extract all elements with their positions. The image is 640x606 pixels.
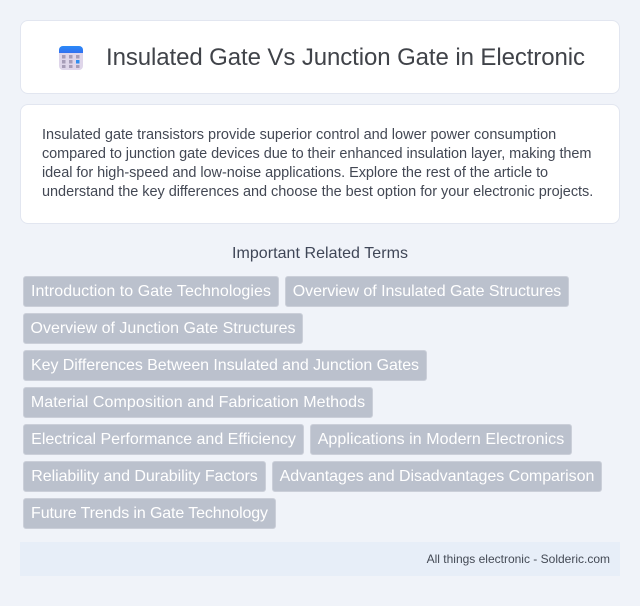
text block: introduction: compared to junction gate devices due to their enhanced insulation layer, making them [42, 146, 591, 162]
tag: Future Trends in Gate Technology [31, 505, 268, 522]
tag [285, 276, 569, 307]
tag: Material Composition and Fabrication Methods [31, 394, 365, 411]
tag [23, 461, 266, 492]
heading: related terms: Important Related Terms [232, 245, 408, 262]
tag: Electrical Performance and Efficiency [31, 431, 296, 448]
title: Insulated Gate Vs Junction Gate in Electronic [106, 44, 585, 71]
tag: Overview of Insulated Gate Structures [293, 283, 561, 300]
tag: Key Differences Between Insulated and Junction Gates [31, 357, 419, 374]
tag [23, 276, 279, 307]
icon: calendar [59, 46, 83, 70]
tag: Introduction to Gate Technologies [31, 283, 271, 300]
panel: title card [20, 20, 620, 94]
panel: intro text [20, 104, 620, 224]
tag: Advantages and Disadvantages Comparison [280, 468, 594, 485]
text block: introduction [42, 127, 593, 200]
tag [272, 461, 602, 492]
tag [23, 313, 303, 344]
text block: introduction: ideal for high-speed and low-noise applications. Explore the rest of the article to [42, 165, 548, 181]
text block: introduction: Insulated gate transistors provide superior control and lower power consumption [42, 127, 556, 143]
tag [23, 350, 427, 381]
tag [23, 498, 276, 529]
tag [310, 424, 572, 455]
panel: term tags [23, 276, 602, 529]
text block: introduction: understand the key differences and choose the best option for your electronic projects. [42, 184, 593, 200]
tag: Overview of Junction Gate Structures [30, 320, 296, 337]
tag [23, 424, 304, 455]
tag: Applications in Modern Electronics [318, 431, 564, 448]
footer bar [20, 542, 620, 576]
footer text: All things electronic - Solderic.com [427, 552, 610, 566]
tag: Reliability and Durability Factors [31, 468, 258, 485]
tag [23, 387, 373, 418]
